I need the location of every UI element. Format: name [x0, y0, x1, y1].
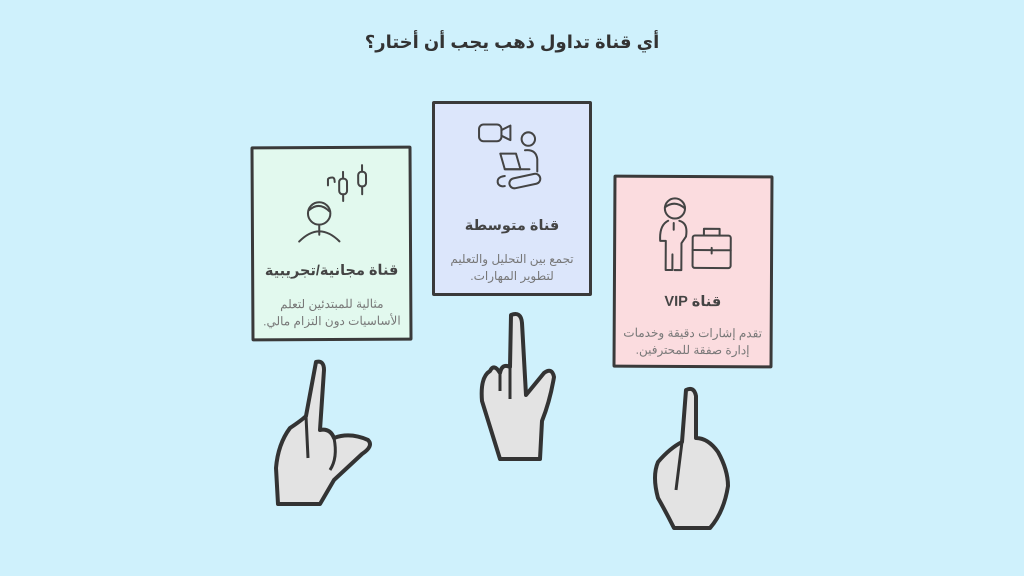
text: medium channel desc	[450, 252, 574, 283]
icon: professional with briefcase	[659, 197, 732, 272]
text: free channel desc: الأساسيات دون التزام مالي.	[263, 314, 401, 328]
panel: medium channel	[432, 101, 592, 296]
icon: learner with laptop and camera	[478, 124, 542, 190]
panel: VIP channel	[612, 175, 774, 368]
panel: free channel	[250, 146, 413, 341]
text: free channel desc: مثالية للمبتدئين لتعلم	[280, 297, 384, 311]
text: VIP channel desc: تقدم إشارات دقيقة وخدمات	[623, 326, 762, 340]
heading: medium channel: قناة متوسطة	[465, 218, 559, 234]
title: أي قناة تداول ذهب يجب أن أختار؟	[365, 32, 659, 52]
text: medium channel desc: تجمع بين التحليل والتعليم	[450, 252, 574, 266]
text: free channel desc	[263, 297, 401, 328]
heading: free channel: قناة مجانية/تجريبية	[265, 263, 398, 279]
text: VIP channel desc	[623, 326, 762, 358]
icon: trader with candles	[298, 164, 368, 243]
icon: hand pointing right card	[653, 386, 730, 530]
heading: VIP channel: قناة VIP	[664, 294, 721, 310]
icon: hand pointing center card	[480, 312, 556, 461]
icon: hand pointing left card	[274, 360, 372, 506]
text: VIP channel desc: إدارة صفقة للمحترفين.	[636, 343, 750, 357]
text: medium channel desc: لتطوير المهارات.	[470, 269, 554, 283]
